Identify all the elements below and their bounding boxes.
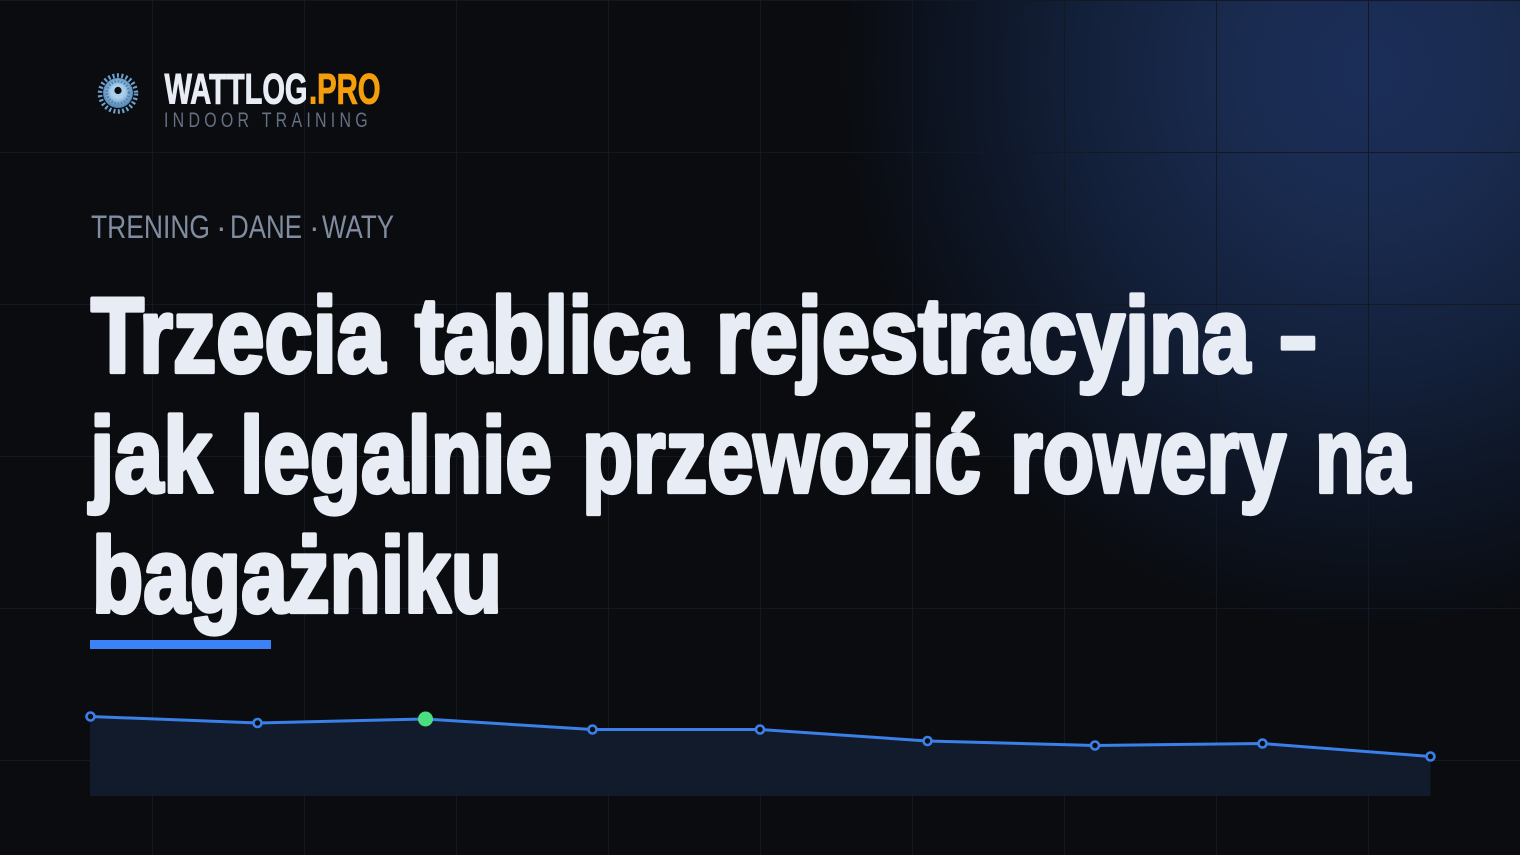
eyebrow label: DANE (230, 209, 302, 245)
title accent underline (90, 640, 271, 649)
logo tagline: INDOOR TRAINING (164, 108, 368, 132)
eyebrow label: · (309, 209, 320, 245)
logo wordmark: .PRO (309, 66, 380, 114)
eyebrow label: TRENING (91, 209, 210, 245)
title (88, 275, 1411, 635)
highlighted chart point (418, 712, 433, 726)
chart line (90, 716, 1430, 756)
eyebrow label (91, 209, 394, 245)
title: rejestracyjna (716, 275, 1251, 395)
icon: cassette sprocket logo (100, 76, 136, 112)
title: przewozić (582, 395, 981, 515)
logo wordmark: WATTLOG (164, 66, 308, 114)
chart markers (86, 712, 1434, 760)
title: rowery (1010, 395, 1286, 515)
title: na (1315, 395, 1411, 515)
chart area fill (90, 716, 1430, 796)
title: bagażniku (92, 515, 502, 635)
title: tablica (415, 275, 689, 395)
eyebrow label: · (216, 209, 227, 245)
title: – (1280, 275, 1316, 395)
line chart (86, 712, 1434, 796)
title: Trzecia (91, 275, 386, 395)
eyebrow label: WATY (322, 209, 394, 245)
title: legalnie (240, 395, 552, 515)
title: jak (88, 395, 212, 515)
